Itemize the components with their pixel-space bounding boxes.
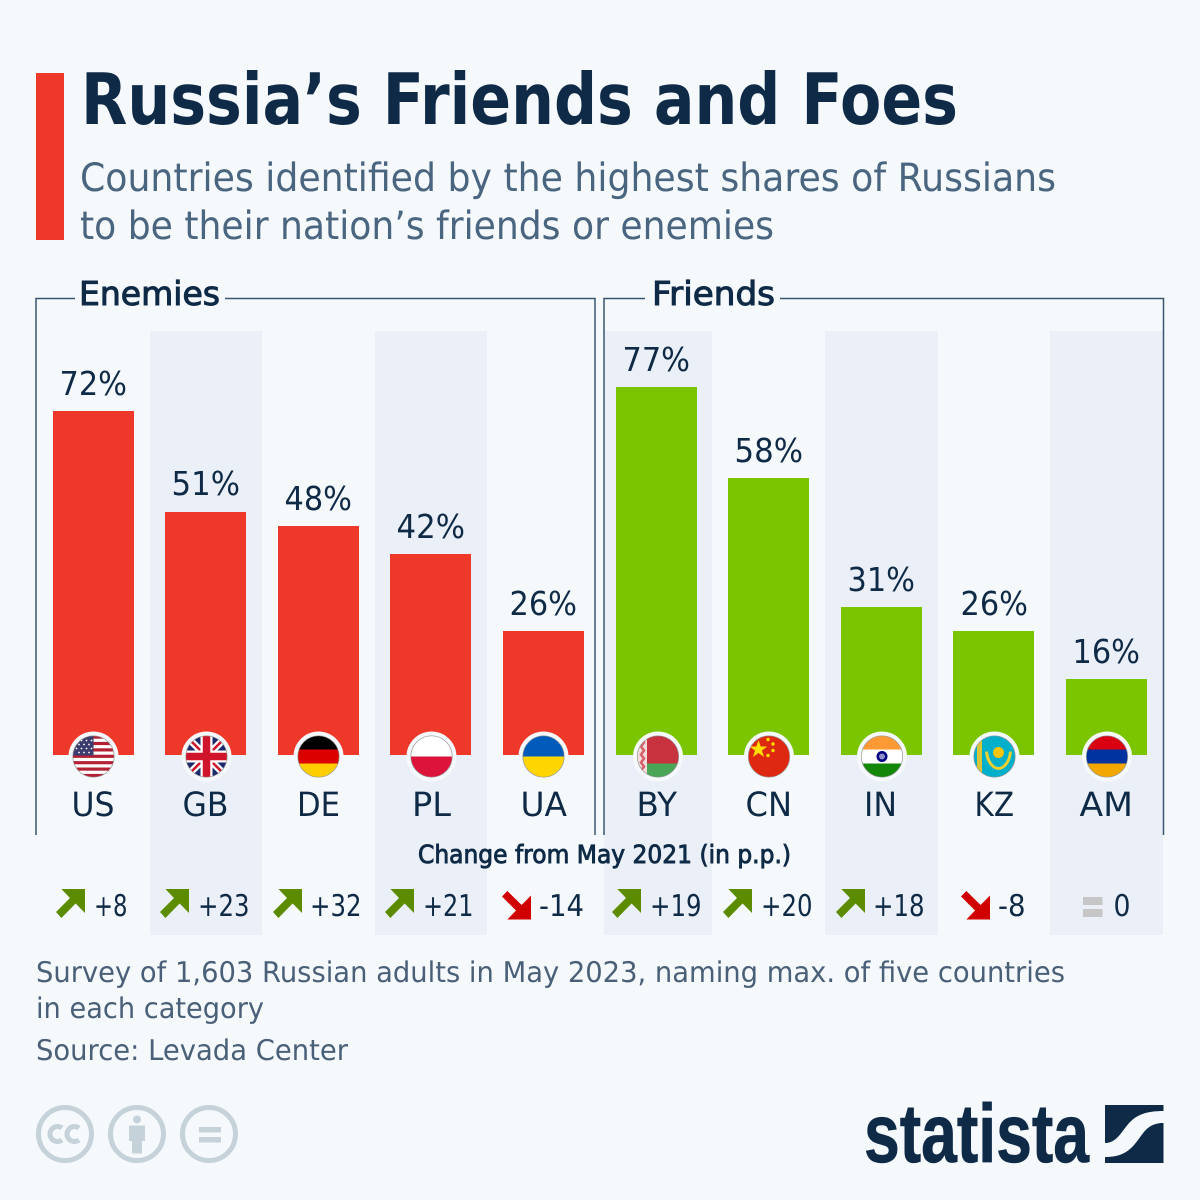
panel: enemies [36,274,595,835]
country codes: enemies [72,785,567,824]
value: UA change: -14 [539,889,584,924]
country codes: friends: KZ [974,785,1014,824]
country codes: friends: BY [636,785,678,824]
value labels: enemies [60,364,577,623]
value: KZ change: -8 [998,889,1026,924]
icon: DE flag [294,732,344,782]
value labels: enemies: 48% [284,479,352,518]
country codes: friends: IN [864,785,897,824]
icon: UA flag [518,732,568,782]
arrow: GB up [160,889,189,918]
arrow: UA down [502,891,531,920]
country codes: enemies: DE [297,785,340,824]
value: IN change: +18 [873,889,924,924]
survey note: Survey of 1,603 Russian adults in May 2023, naming max. of five countries [36,956,1065,989]
arrow: DE up [273,889,302,918]
accent bar [36,73,64,240]
icon: PL flag [406,732,456,782]
icon: AM equal [1083,897,1102,917]
subtitle: Countries identified by the highest shares of Russians [80,156,1056,201]
value labels: friends [622,340,1140,671]
subtitle: to be their nation’s friends or enemies [80,204,774,249]
panel: friends [604,274,1164,835]
heading: friends: Friends [652,274,775,313]
bar chart: friends [616,387,1147,755]
survey note: in each category [36,992,264,1025]
value labels: enemies: 42% [396,507,465,546]
icon: GB flag [182,732,232,782]
value: BY change: +19 [650,889,702,924]
country codes: enemies: US [72,785,114,824]
value: CN change: +20 [761,889,812,924]
value: DE change: +32 [310,889,362,924]
icon: US flag [68,732,118,782]
value labels: friends: 77% [622,340,690,379]
icon: CN flag [744,732,794,782]
subtitle [80,156,1056,249]
country codes: friends: CN [746,785,792,824]
country codes: enemies: UA [520,785,567,824]
icon: creative commons licence [38,1108,236,1160]
icon: IN flag [857,732,907,782]
value labels: enemies: 72% [60,364,127,403]
country codes: friends [636,785,1133,824]
source: Source: Levada Center [36,1034,348,1067]
arrow: PL up [385,889,414,918]
value: GB change: +23 [198,889,250,924]
country codes: friends: AM [1080,785,1133,824]
value labels: friends: 31% [848,560,915,599]
country codes: enemies: GB [182,785,228,824]
value: US change: +8 [94,889,128,924]
arrow: US up [56,889,85,918]
value labels: friends: 26% [960,584,1028,623]
change arrows and values [56,889,1130,924]
alternating column bands [150,331,1163,935]
heading: enemies: Enemies [79,274,220,313]
value labels: friends: 16% [1072,632,1140,671]
value: AM change: 0 [1114,889,1130,924]
icon: KZ flag [970,732,1020,782]
arrow: CN up [723,889,752,918]
logo: statista: statista [864,1087,1090,1180]
icon: AM flag [1082,732,1132,782]
title: Russia’s Friends and Foes [81,58,958,141]
value labels: enemies: 51% [172,464,240,503]
arrow: KZ down [961,891,990,920]
icon: BY flag [633,732,683,782]
survey note [36,956,1065,1025]
value: PL change: +21 [423,889,474,924]
country codes: enemies: PL [412,785,451,824]
arrow: BY up [612,889,641,918]
value labels: enemies: 26% [510,584,577,623]
change heading: Change from May 2021 (in p.p.) [418,840,791,869]
value labels: friends: 58% [734,431,803,470]
bar chart: enemies [53,411,584,755]
arrow: IN up [836,889,865,918]
